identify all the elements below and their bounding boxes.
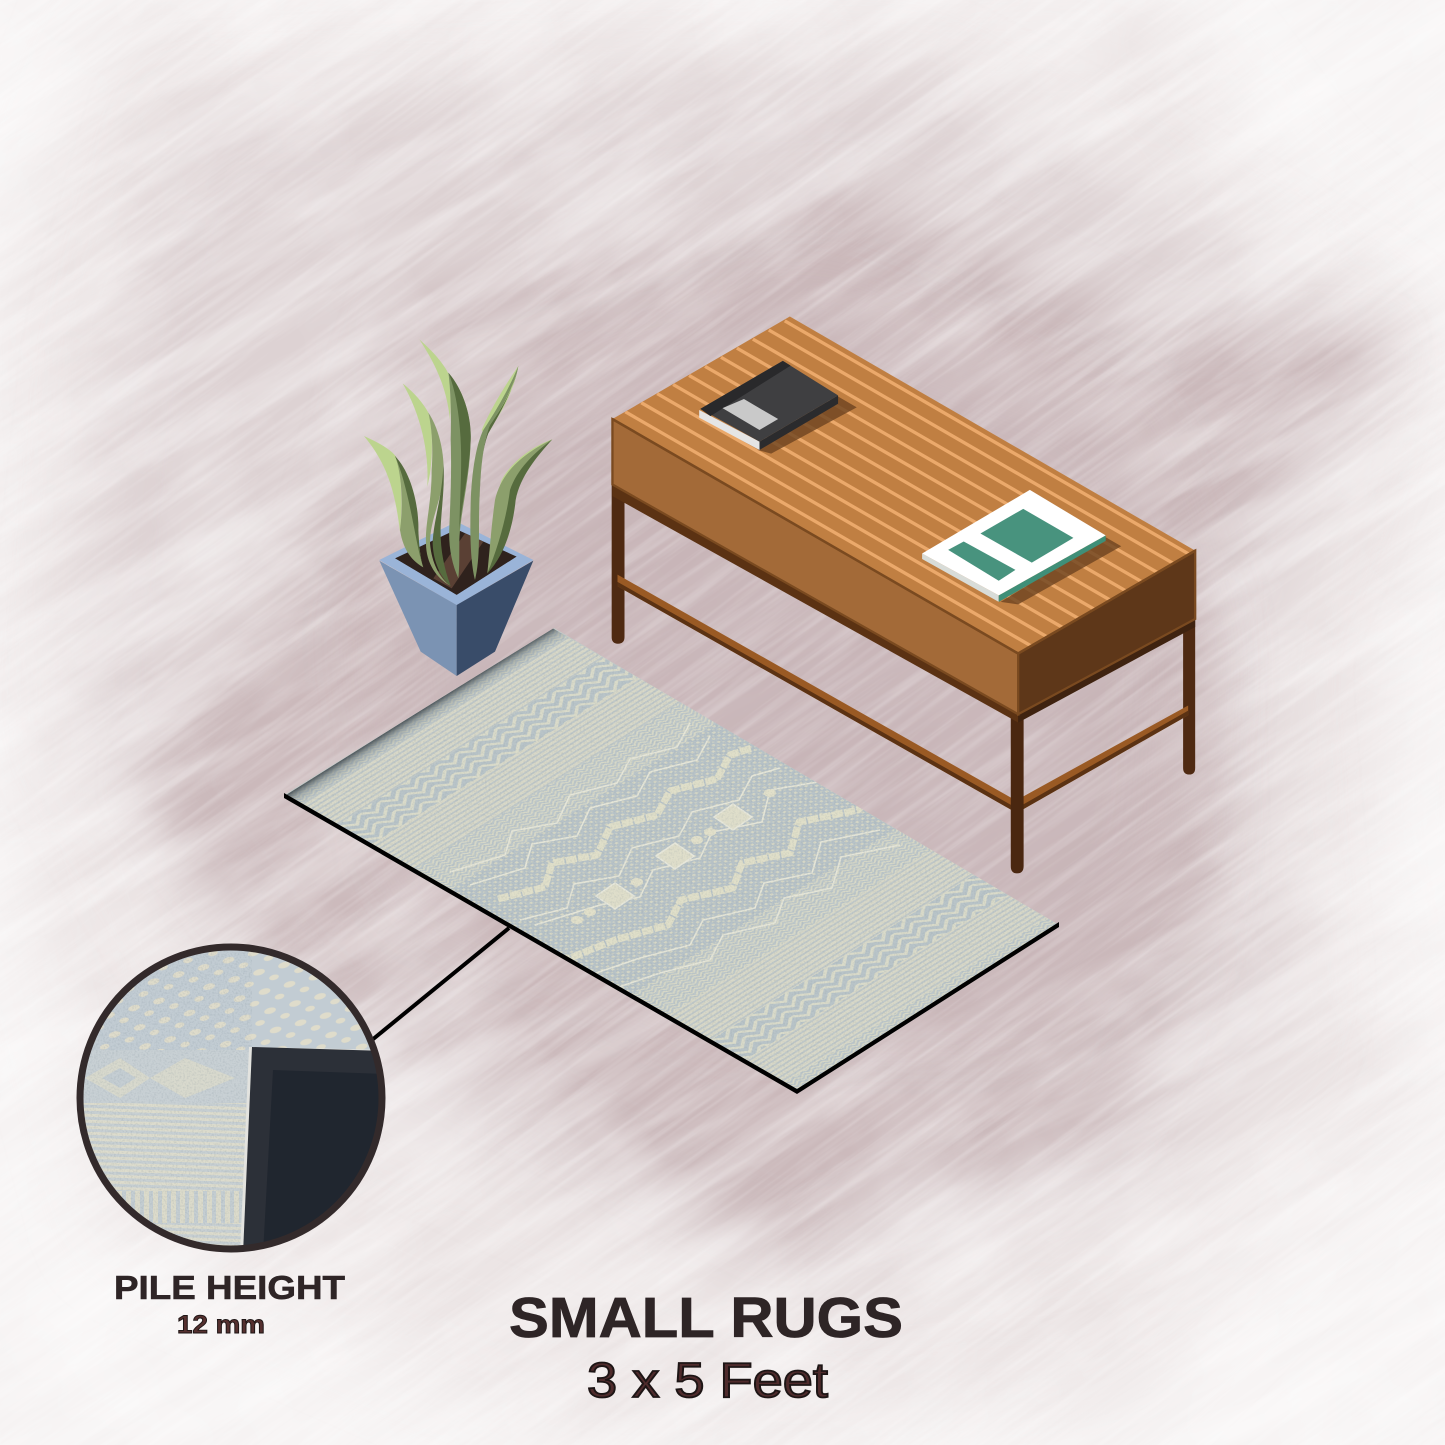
subheading: size: 3 x 5 Feet xyxy=(587,1354,828,1408)
back-left leg xyxy=(612,484,625,644)
right stretcher xyxy=(1022,705,1188,810)
pot front rim xyxy=(379,557,533,605)
rug bands xyxy=(286,628,1065,1092)
back-right leg xyxy=(1183,619,1195,775)
long side panel xyxy=(612,419,1018,714)
leaf 1 xyxy=(364,436,423,567)
icon: dark notebook xyxy=(699,361,857,454)
pot back rim xyxy=(379,522,533,605)
circle rug dark backing xyxy=(240,1047,385,1254)
circle rug front xyxy=(77,944,385,1254)
illustration: patterned rug xyxy=(284,628,1065,1094)
icon: white magazine xyxy=(922,490,1121,604)
callout leader line xyxy=(372,928,509,1040)
apron frame xyxy=(612,484,1195,723)
illustration: potted plant xyxy=(364,339,552,676)
table top with stripes xyxy=(612,317,1195,654)
rug medallions xyxy=(571,789,776,924)
leaf 3 xyxy=(419,339,471,578)
leaf 4 xyxy=(470,366,518,580)
rug zigzag motifs xyxy=(450,723,900,990)
rug black edge xyxy=(284,793,1059,1094)
leaf 2 xyxy=(403,383,451,586)
pot right face xyxy=(457,561,533,676)
left stretcher xyxy=(618,575,1013,811)
heading: small rugs: SMALL RUGS xyxy=(509,1286,903,1350)
label: pile height: PILE HEIGHT xyxy=(114,1269,345,1306)
soil xyxy=(395,529,517,595)
label: 12 mm: 12 mm xyxy=(177,1311,265,1339)
leaf 5 xyxy=(487,439,552,573)
callout: pile height circle xyxy=(77,944,385,1254)
short side panel xyxy=(1018,551,1195,714)
front leg xyxy=(1011,715,1024,873)
illustration: coffee table xyxy=(612,317,1195,873)
rug surface xyxy=(284,628,1065,1092)
pot left face xyxy=(379,561,457,676)
